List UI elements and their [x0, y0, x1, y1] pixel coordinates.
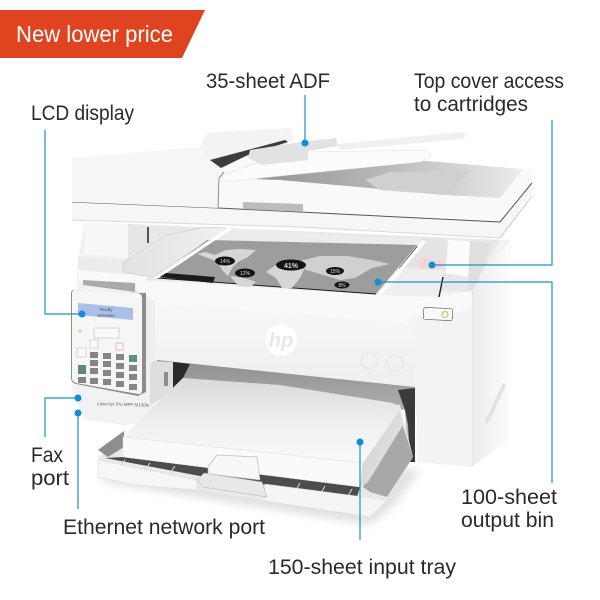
body front right of door	[407, 310, 472, 467]
callout: input tray	[268, 438, 456, 579]
scanner base band	[72, 183, 532, 238]
door icons	[361, 353, 403, 371]
control panel	[71, 280, 146, 396]
callout: fax port: port	[31, 467, 69, 490]
callout: fax port: Fax	[31, 444, 63, 467]
callout: top cover: Top cover access	[414, 70, 564, 93]
paper stack	[123, 378, 400, 463]
badge: new lower price	[0, 10, 205, 58]
model label: LaserJet Pro MFP M130fn	[97, 401, 150, 408]
keypad	[78, 352, 137, 390]
body right side	[472, 240, 510, 467]
output recess	[128, 224, 500, 292]
left shelf	[78, 257, 137, 280]
continents	[197, 249, 256, 276]
scanner front notch	[243, 202, 303, 212]
printed page with world map: 12%	[240, 271, 251, 277]
input tray base	[98, 378, 413, 517]
small ledge at bin right	[382, 268, 443, 297]
front band	[137, 280, 472, 333]
left column	[85, 222, 128, 258]
LCD screen: Ready	[99, 307, 113, 312]
tray gripper left	[98, 431, 124, 457]
callout: fax port	[31, 394, 82, 490]
callout: ethernet: Ethernet network port	[63, 516, 265, 539]
callout: input tray: 150-sheet input tray	[268, 556, 456, 579]
ADF upper tray	[338, 132, 466, 150]
arrow buttons	[77, 328, 123, 357]
data bubbles	[215, 256, 235, 266]
front door panel	[155, 303, 415, 387]
ADF lower tray	[222, 150, 431, 182]
callout: 35-sheet ADF	[206, 70, 330, 146]
right column	[445, 240, 470, 277]
HP logo	[265, 324, 297, 356]
tray right inner	[363, 417, 413, 497]
paper slot	[157, 360, 415, 462]
printed page with world map: 15%	[330, 269, 341, 275]
callout: ethernet	[63, 410, 265, 539]
printer lower body	[72, 222, 510, 467]
body left of door	[137, 290, 157, 400]
callout: LCD display	[31, 102, 134, 318]
ADF top	[200, 128, 294, 168]
tray front right	[265, 484, 387, 517]
ADF body left	[72, 147, 219, 208]
callout: top cover: to cartridges	[414, 93, 528, 116]
HP logo: hp	[269, 330, 293, 352]
callout: LCD display: LCD display	[31, 102, 134, 125]
ground shadow	[100, 445, 420, 525]
side mechanism	[150, 361, 173, 405]
LCD screen	[78, 303, 133, 320]
printed page with world map: 14%	[220, 259, 231, 265]
ADF paper guide	[248, 138, 338, 165]
output bin	[123, 227, 227, 277]
tray slots	[105, 457, 360, 497]
cartridge latch	[418, 258, 443, 269]
printed page with world map	[153, 228, 426, 295]
callout: output bin: 100-sheet	[461, 486, 557, 509]
callout: output bin	[374, 278, 557, 532]
callout: 35-sheet ADF: 35-sheet ADF	[206, 70, 330, 93]
printer illustration	[71, 128, 532, 525]
LCD screen: Wireless	[97, 313, 115, 318]
power button	[423, 307, 453, 321]
badge: new lower price: New lower price	[16, 21, 173, 47]
tray front wall left	[98, 460, 197, 490]
callout: output bin: output bin	[461, 509, 554, 532]
scanner lid	[72, 160, 532, 222]
paper guide	[208, 455, 260, 480]
printed page with world map: 41%	[284, 263, 299, 270]
callout: top cover	[414, 70, 564, 268]
printed page with world map: 8%	[338, 283, 346, 289]
flatbed recess	[225, 161, 523, 198]
